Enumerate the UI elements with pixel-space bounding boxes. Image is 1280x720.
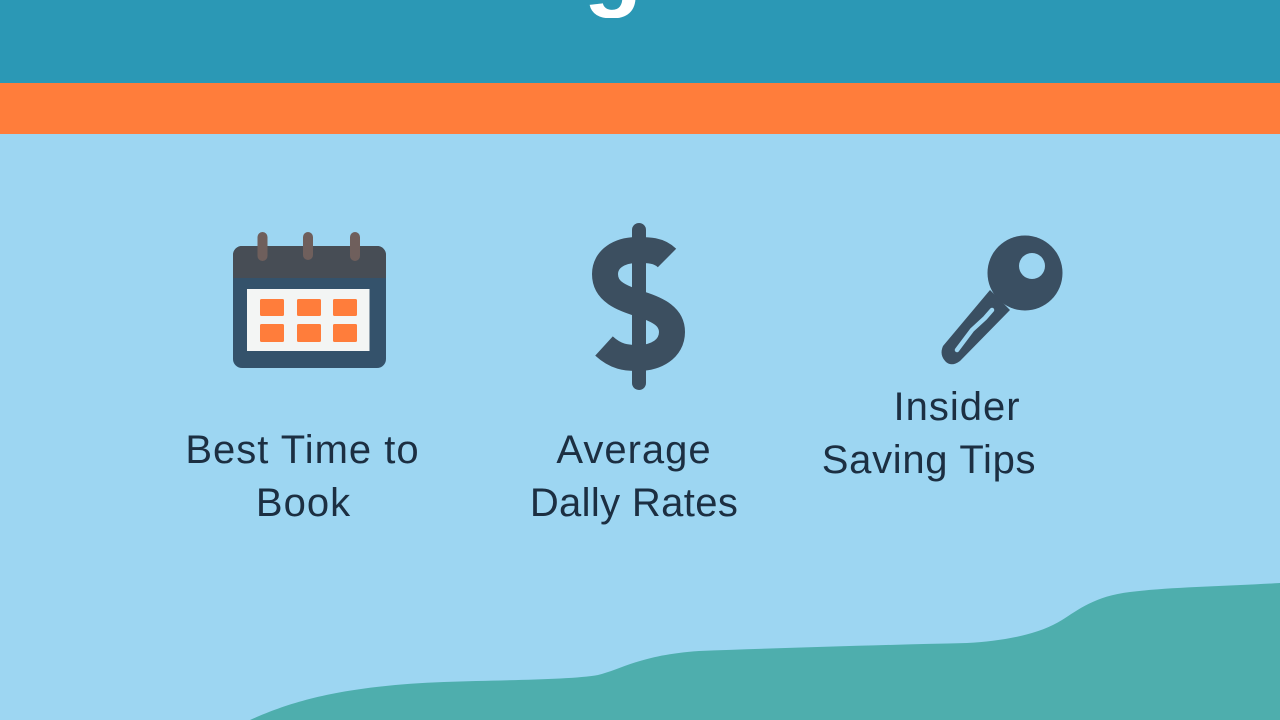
label: best time to book: Best Time to bbox=[185, 428, 420, 472]
label: best time to book bbox=[185, 428, 420, 524]
icon: key bbox=[942, 236, 1062, 364]
label: average daily rates: Average bbox=[556, 428, 712, 472]
label: insider saving tips bbox=[822, 385, 1036, 482]
label: average daily rates: Dally Rates bbox=[530, 480, 738, 524]
panel: insider saving tips bbox=[822, 236, 1062, 482]
header band bbox=[0, 0, 1280, 83]
icon: calendar bbox=[233, 232, 386, 368]
panel: best time to book bbox=[185, 232, 420, 524]
label: insider saving tips: Insider bbox=[893, 385, 1021, 429]
icon: dollar sign bbox=[592, 223, 685, 390]
label: average daily rates bbox=[530, 428, 738, 524]
orange stripe bbox=[0, 83, 1280, 134]
label: insider saving tips: Saving Tips bbox=[822, 438, 1036, 482]
panel: average daily rates bbox=[530, 223, 738, 524]
label: best time to book: Book bbox=[256, 480, 351, 524]
